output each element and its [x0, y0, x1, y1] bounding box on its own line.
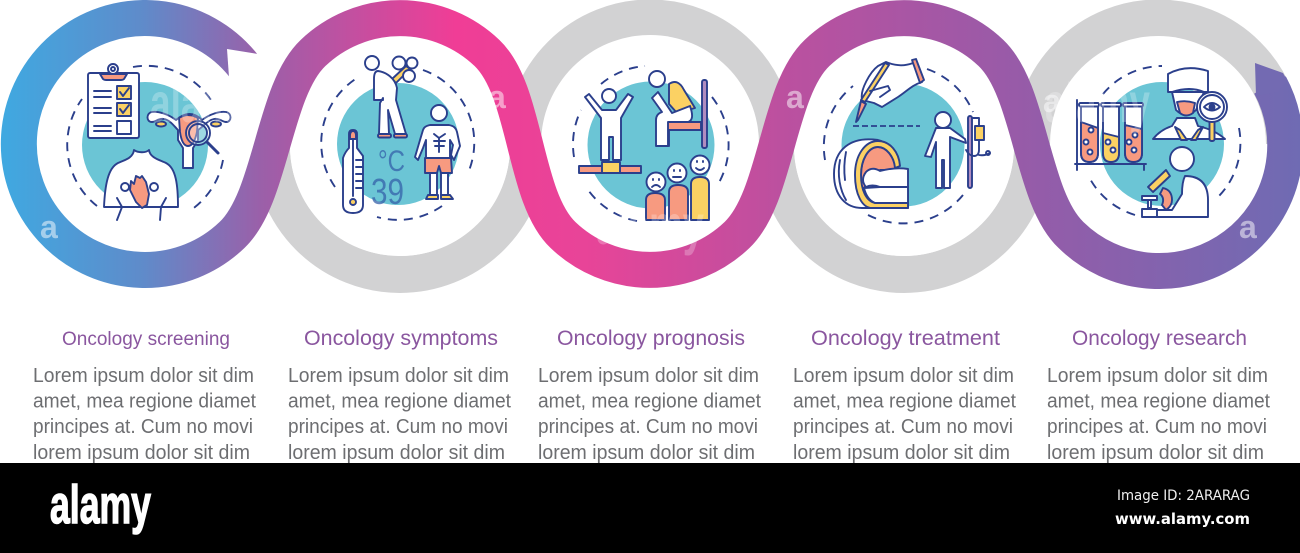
panel: oncology prognosis icon [573, 66, 729, 221]
watermark letters [40, 79, 1257, 245]
text block: treatment: Lorem ipsum dolor sit dim [793, 365, 1014, 387]
icon: gloved hand with scalpel [856, 59, 924, 122]
surgical incision line [853, 125, 920, 127]
icon: MRI scanner [834, 139, 908, 208]
icon: torso self exam [104, 150, 178, 220]
panel: oncology screening icon [67, 64, 230, 220]
heading: oncology screening: Oncology screening [62, 329, 230, 350]
grey background rings [272, 18, 1284, 274]
heading: oncology symptoms: Oncology symptoms [304, 327, 498, 350]
watermark letters: a [786, 79, 804, 115]
watermark letters: a [488, 79, 506, 115]
text block: symptoms: lorem ipsum dolor sit dim [288, 442, 505, 464]
text block: research [1047, 365, 1270, 464]
text block: screening: amet, mea regione diamet [33, 390, 256, 412]
text block: symptoms: principes at. Cum no movi [288, 416, 508, 438]
temperature reading: °C [378, 145, 405, 178]
alamy logo: alamy [50, 475, 151, 535]
icon: man with shorts [415, 105, 460, 199]
watermark stamps: alamy [596, 193, 704, 256]
text block: research: Lorem ipsum dolor sit dim [1047, 365, 1268, 387]
text block: symptoms: Lorem ipsum dolor sit dim [288, 365, 509, 387]
text block: symptoms [288, 365, 511, 464]
text block: prognosis: Lorem ipsum dolor sit dim [538, 365, 759, 387]
text block: treatment: lorem ipsum dolor sit dim [793, 442, 1010, 464]
heading: oncology research: Oncology research [1072, 327, 1247, 350]
icon: thermometer [343, 130, 363, 213]
text block: screening: lorem ipsum dolor sit dim [33, 442, 250, 464]
text block: research: lorem ipsum dolor sit dim [1047, 442, 1264, 464]
temperature reading: 39 [371, 171, 404, 212]
watermark stamps: alamy [1045, 71, 1150, 134]
watermark stamps [150, 71, 1150, 256]
text block: treatment [793, 365, 1016, 464]
panel: oncology treatment icon [824, 59, 990, 223]
watermark letters: a [1043, 83, 1061, 119]
icon: sad seated person [649, 71, 707, 148]
temperature reading [371, 145, 405, 212]
text block: prognosis: principes at. Cum no movi [538, 416, 758, 438]
text block: screening: principes at. Cum no movi [33, 416, 253, 438]
icon: person on podium [579, 89, 641, 173]
icon: clipboard checklist [88, 64, 139, 138]
heading: oncology treatment: Oncology treatment [811, 327, 1000, 350]
text block: prognosis: amet, mea regione diamet [538, 390, 761, 412]
text block: prognosis [538, 365, 761, 464]
watermark letters: a [40, 209, 58, 245]
icon: patient with IV drip [925, 112, 990, 188]
icon: tired person with wind-up key [365, 56, 418, 138]
gradient ribbon with arrow [19, 18, 1287, 271]
icon: scientist at microscope [1142, 147, 1208, 217]
panel: oncology research icon [1075, 66, 1240, 217]
icon: test tubes in rack [1075, 100, 1146, 170]
icon: doctor with magnifier [1153, 68, 1227, 141]
text block: symptoms: amet, mea regione diamet [288, 390, 511, 412]
watermark stamps: alamy [150, 71, 255, 134]
text block: research: principes at. Cum no movi [1047, 416, 1267, 438]
heading: oncology prognosis: Oncology prognosis [557, 327, 745, 350]
image id: Image ID: 2ARARAG [1117, 488, 1250, 504]
white discs [37, 35, 1266, 256]
footer bar [0, 463, 1300, 553]
icon: uterus with magnifier [148, 112, 230, 168]
website: www.alamy.com [1115, 510, 1250, 528]
text block: prognosis: lorem ipsum dolor sit dim [538, 442, 755, 464]
text block: screening: Lorem ipsum dolor sit dim [33, 365, 254, 387]
watermark letters: a [1239, 209, 1257, 245]
text block: treatment: amet, mea regione diamet [793, 390, 1016, 412]
icon: mood faces on bars [646, 156, 710, 220]
text block: screening [33, 365, 256, 464]
panel: oncology symptoms icon [321, 56, 474, 220]
text block: treatment: principes at. Cum no movi [793, 416, 1013, 438]
text block: research: amet, mea regione diamet [1047, 390, 1270, 412]
